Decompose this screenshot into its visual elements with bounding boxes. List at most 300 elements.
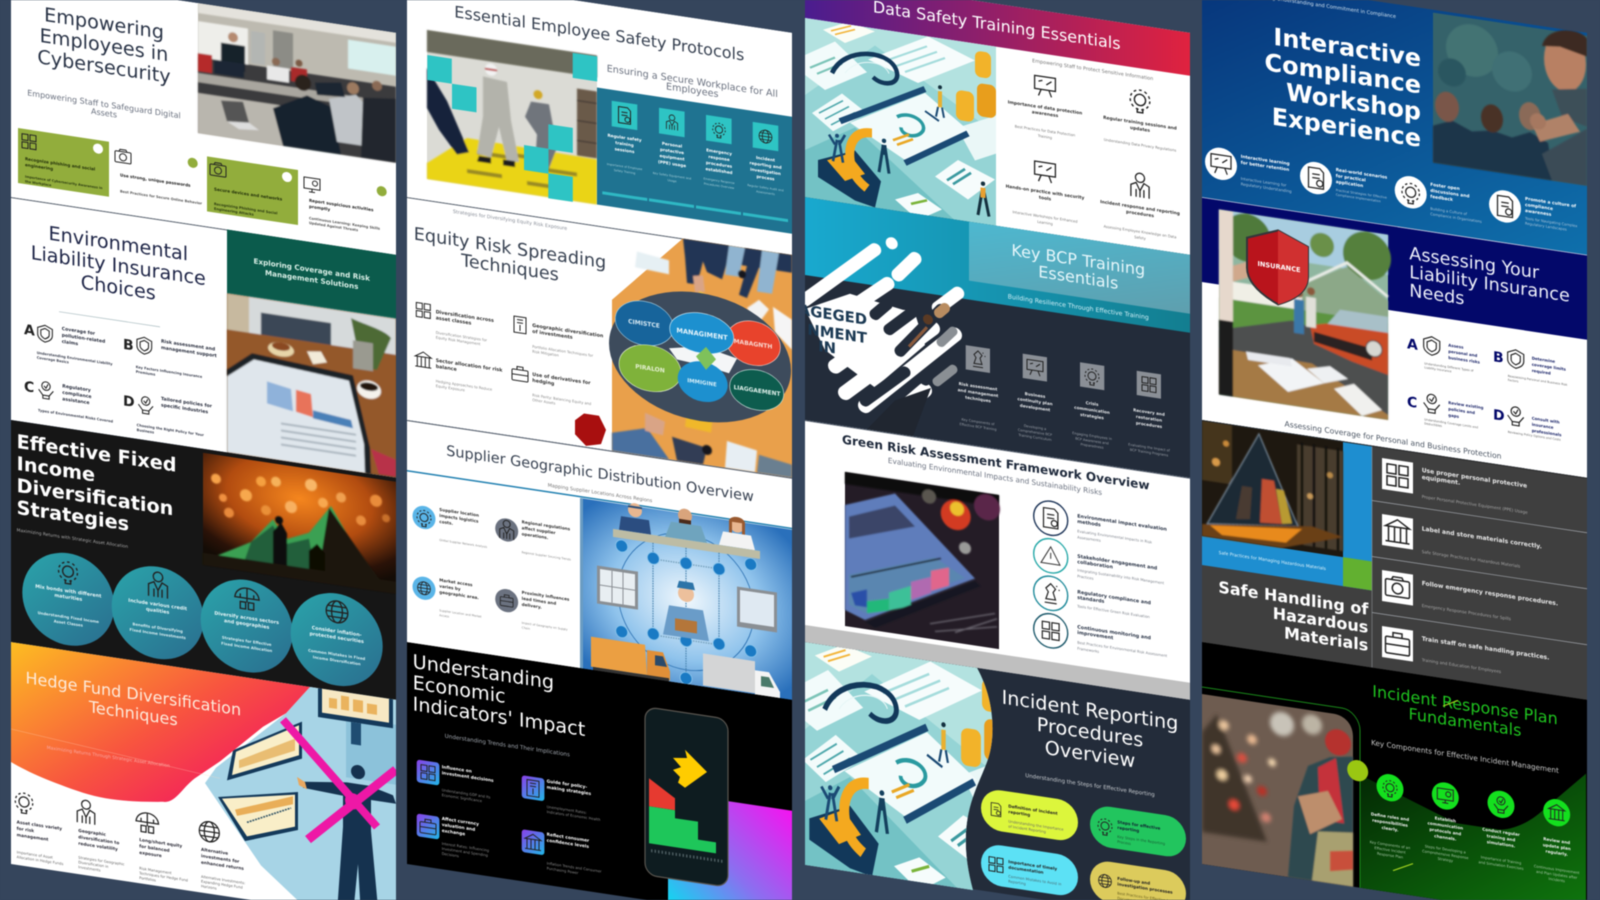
item C: Understanding Coverage Limits and (1424, 417, 1478, 429)
item 3: Crisis (1086, 400, 1098, 407)
item D: Choosing the Right Policy for Your (137, 423, 204, 437)
item 3 (1072, 361, 1112, 451)
item 3: Engaging Employees in (1072, 431, 1112, 441)
slide: Understanding Economic Indicators' Impact (407, 642, 792, 900)
circle card 2: Include various credit (128, 599, 187, 612)
row 3 (1382, 570, 1558, 628)
blue block with caption: Safe Practices for Managing Hazardous Materials (1219, 550, 1327, 572)
item 3 (415, 351, 503, 398)
item 4: BCP Training Programs (1130, 448, 1168, 457)
subtitle: Understanding Trends and Their Implications (445, 734, 570, 758)
item 2: Establish (1435, 815, 1456, 824)
graphic: white diagonal strokes with cropped photo text: NMENT (807, 320, 868, 347)
slide: Incident Response Plan Fundamentals (1202, 642, 1587, 900)
subtitle: Assets (91, 107, 117, 120)
item 3: Tools for Effective Green Risk Evaluation (1076, 604, 1150, 619)
card 3 (207, 156, 298, 225)
item B: coverage limits (1532, 362, 1567, 372)
item 2: Real-world scenarios (1336, 168, 1387, 181)
photo: team around strategy diagram: IMMIGINE (687, 378, 717, 388)
item 3: Interactive Workshops for Enhanced (1012, 210, 1078, 224)
pill 2: Process (1117, 840, 1131, 846)
row 4 (1382, 626, 1549, 682)
pink cross (283, 720, 396, 853)
item A: Understanding Different Types of (1424, 361, 1473, 373)
item 2: affect supplier (522, 525, 556, 535)
item 3: Techniques for Hedge Fund (138, 871, 188, 883)
item 2: for practical (1336, 173, 1366, 184)
item 3: Regulatory compliance and (1077, 590, 1151, 606)
item 1: methods (1077, 519, 1101, 528)
item 2: Indicators of Economic Health (547, 810, 600, 822)
item 4: Evaluating the Impact of (1128, 442, 1170, 453)
item 3: valuation and (442, 822, 475, 833)
item D: Tailored policies for (161, 397, 212, 410)
item 4: Continuous monitoring and (1077, 625, 1151, 641)
item 3 (1034, 574, 1151, 625)
item 2 (1103, 85, 1177, 153)
title: Compliance (1265, 48, 1421, 100)
item 2 (77, 799, 125, 876)
item 3 (417, 812, 489, 863)
card 3: Engineering Attacks (214, 207, 254, 217)
item 2: Risk Mitigation (532, 350, 559, 358)
bottom caption: Assessing Coverage for Personal and Business Protection (1285, 419, 1502, 461)
item 4: Frameworks (1077, 647, 1099, 654)
item 4 (522, 828, 602, 879)
item 1: Asset class variety (17, 820, 62, 832)
item 3: Learning (1037, 220, 1053, 226)
item 2: communication (1427, 820, 1463, 831)
title panel: Key BCP Training (1011, 241, 1145, 280)
illustration: trader with monitors (205, 671, 396, 900)
item 3 (412, 573, 482, 624)
item A: Coverage for (62, 327, 95, 337)
title: Experience (1272, 103, 1421, 153)
item 4: hedging (532, 378, 555, 387)
item C: gaps (1448, 412, 1460, 419)
item 2: Unemployment Rates: (547, 805, 587, 815)
teal panel (597, 88, 792, 234)
item 4 (199, 820, 245, 895)
item 1 (1205, 145, 1292, 194)
title: Safe Handling of (1218, 578, 1368, 619)
circle card 3: Strategies for Effective (222, 635, 271, 647)
photo: team around strategy diagram (609, 227, 792, 478)
subtitle: Ensuring a Secure Workplace for All (607, 64, 778, 100)
title: Diversification (17, 474, 173, 520)
item 2: Regular training sessions and (1103, 116, 1177, 132)
title: Indicators' Impact (413, 692, 586, 741)
pill 1: Definition of incident (1008, 804, 1058, 816)
slide: Environmental Liability Insurance Choices (11, 197, 396, 478)
item C: C (24, 379, 34, 396)
card 3: Secure devices and networks (214, 186, 283, 202)
item 3: and Simulation Exercises (1479, 860, 1524, 871)
item 4: compliance (1525, 202, 1553, 212)
item 4: regularly. (1546, 849, 1568, 857)
item 1 (15, 792, 63, 866)
item 2: Strategies for Geographic (78, 856, 125, 867)
item 4: Regulatory Landscapes (1525, 221, 1567, 232)
item 4 (512, 366, 591, 411)
item A: claims (62, 339, 78, 347)
row 2: Label and store materials correctly. (1422, 525, 1542, 550)
item 2: application (1336, 179, 1363, 189)
circle card 1: Mix bonds with different (35, 585, 101, 600)
card 1: engineering (25, 162, 53, 171)
item 3: Investment and Spending (442, 847, 488, 858)
item 4: Purchasing Power (547, 866, 579, 875)
item 2: Practices (1077, 574, 1094, 581)
item 4: delivery. (522, 602, 542, 610)
subtitle: Understanding the Steps for Effective Reporting (1025, 773, 1155, 798)
item 4: Alternative Investments: (201, 875, 245, 885)
item 2 (522, 775, 600, 822)
photo: insurance shield, family and car (1219, 210, 1391, 420)
item 2: Strategy (1438, 857, 1454, 863)
graphic: white diagonal strokes with cropped photo text: IN (818, 337, 836, 358)
item 2 (514, 316, 604, 364)
item 4: Other Assets (532, 398, 555, 406)
item 3: training and (1487, 833, 1515, 842)
item B: B (123, 337, 134, 354)
item 3: Long/short equity (139, 838, 182, 849)
row 2: Safe Storage Practices for Hazardous Materials (1422, 549, 1520, 569)
item 1 (416, 302, 494, 348)
card 3: Recognizing Phishing and Social (214, 202, 277, 215)
slide: Effective Fixed Income Diversification Strategies (11, 420, 396, 701)
graphic: white diagonal strokes with cropped photo text: AGEGED (799, 301, 867, 329)
teal panel: protective (660, 147, 684, 155)
item A: personal and (1448, 349, 1477, 358)
pill 4: Follow-up and (1117, 876, 1150, 886)
title: Incident Reporting (1002, 686, 1178, 735)
item C: policies and (1448, 406, 1475, 415)
item 2: Guide for policy- (547, 779, 587, 791)
pill 2 (1090, 804, 1186, 859)
item D: Reviewing Policy Options and Costs (1508, 430, 1561, 442)
item 2: Diversification in (78, 860, 108, 869)
item A: pollution-related (62, 332, 105, 345)
item 1: Global Supplier Network Analysis (439, 538, 488, 549)
item 4: Assessing Employee Knowledge on Data (1104, 225, 1176, 239)
title: Equity Risk Spreading (414, 225, 606, 273)
item 2 (1422, 779, 1469, 865)
item 3: Preparedness (1081, 442, 1104, 450)
slide: Hedge Fund Diversification Techniques (11, 642, 396, 900)
photo: insurance shield, family and car: INSURANCE (1257, 260, 1301, 274)
phone graphic (645, 707, 728, 887)
title: Needs (1409, 281, 1464, 310)
item C: compliance (62, 390, 92, 400)
item D: D (123, 393, 135, 411)
title: Green Risk Assessment Framework Overview (842, 433, 1150, 493)
item 4: Proximity influences (522, 590, 569, 602)
title: Effective Fixed (17, 430, 177, 477)
title: Workshop (1286, 78, 1421, 126)
item 4 (1489, 188, 1578, 233)
item 4: improvement (1077, 630, 1114, 641)
title: Hazardous (1273, 604, 1368, 637)
item D: professionals (1532, 428, 1562, 437)
item D: specific industries (161, 402, 208, 415)
item 1: Key Components of (961, 417, 995, 426)
item C: Review existing (1448, 400, 1483, 410)
card 2: Best Practices for Secure Online Behavior (120, 189, 202, 206)
item 2: Developing a (1024, 424, 1046, 431)
item 2: Business (1025, 391, 1045, 399)
item 4: Best Practices for Environmental Risk Assessment (1077, 641, 1167, 658)
item 4: update plan (1543, 842, 1571, 851)
item 4: enhanced returns (201, 860, 244, 872)
photo: team around strategy diagram: CIMISTCE (628, 318, 660, 330)
item A: Coverage Basics (37, 356, 69, 364)
item 3: Building a Culture of (1430, 207, 1467, 216)
item 1 (1008, 71, 1082, 145)
green banner: Exploring Coverage and Risk (254, 256, 370, 283)
item 4: confidence levels (547, 838, 589, 850)
item 1: Importance of Asset (17, 850, 53, 860)
item 1: Diversification across (436, 310, 494, 324)
title: Liability Insurance (31, 241, 206, 290)
slide: Green Risk Assessment Framework Overview (805, 420, 1190, 701)
item 3: Sector allocation for risk (436, 359, 502, 374)
circle card 2: Fixed Income Investments (130, 627, 187, 640)
item 3: for balanced (139, 843, 170, 854)
teal panel: Procedures Overview (704, 182, 735, 190)
teal panel: sessions (615, 146, 635, 154)
item 4: Alternative (201, 848, 228, 857)
green banner: Management Solutions (265, 268, 358, 291)
item A: business risks (1448, 355, 1480, 365)
item 1: Effective Incident (1374, 846, 1406, 855)
item 1 (1370, 771, 1410, 861)
item 2: Stakeholder engagement and (1077, 555, 1157, 572)
item 1: Risk assessment (959, 381, 997, 392)
row 3: Follow emergency response procedures. (1422, 580, 1558, 607)
title: Income (17, 452, 95, 487)
item 2: Regional Supplier Sourcing Trends (522, 550, 571, 562)
subtitle: Maximizing Returns with Strategic Asset Allocation (17, 527, 128, 550)
item 1: Interactive Learning for (1241, 176, 1286, 188)
item 1: responsibilities (1372, 818, 1408, 828)
item 2 (1034, 536, 1165, 591)
pill 1: reporting (1008, 809, 1030, 817)
item 3: Supplier Location and Market (439, 608, 482, 619)
card 1 (18, 128, 109, 197)
title: Choices (81, 271, 156, 305)
item 1: management (17, 832, 48, 843)
item B: Premiums (136, 370, 155, 377)
teal panel: training (615, 140, 634, 148)
green banner (227, 229, 396, 319)
item 1 (1034, 499, 1167, 553)
item 4: Promote a culture of (1525, 197, 1576, 210)
circle card 3: Diversify across sectors (214, 612, 279, 626)
item 2: Investments (78, 865, 101, 873)
item B: B (1493, 349, 1504, 367)
item D: Business (137, 428, 154, 435)
title: Essential Employee Safety Protocols (454, 2, 744, 65)
title: Strategies (17, 496, 129, 536)
circle card 3 (200, 578, 292, 674)
item B: Factors (1508, 378, 1519, 384)
photo: workers in warehouse (427, 30, 597, 204)
item 2: operations. (522, 531, 549, 540)
subtitle: Mapping Supplier Locations Across Regions (548, 483, 653, 504)
item 4: restoration (1136, 414, 1162, 423)
slide: Supplier Geographic Distribution Overview (407, 420, 792, 701)
item 1: and management (958, 387, 998, 398)
item 3: Access (439, 613, 450, 619)
item 3: Affect currency (442, 817, 479, 827)
circle card 4: protected securities (309, 631, 364, 645)
item 2: Steps for Developing a (1425, 844, 1466, 855)
photo: glowing chart landscape (203, 453, 396, 594)
item 1: clearly. (1382, 825, 1399, 833)
circle card 4: Common Mistakes in Fixed (308, 648, 365, 661)
item 1: asset classes (436, 315, 471, 327)
item 4 (1128, 369, 1171, 458)
teal panel: procedures (706, 160, 733, 169)
item C (1407, 391, 1484, 434)
slide: Incident Reporting Procedures Overview (793, 637, 1190, 900)
teal panel: Key Safety Equipment and (653, 171, 691, 181)
item 4: Expanding Hedge Fund (201, 880, 243, 890)
item 3: varies by (439, 583, 461, 592)
subtitle: Empowering Staff to Protect Sensitive Information (1032, 58, 1153, 82)
item 3: geographic area. (439, 589, 479, 600)
item D (1493, 404, 1562, 442)
item 2: continuity plan (1017, 396, 1053, 406)
item 4: Reflect consumer (547, 833, 589, 844)
title: Understanding (413, 650, 554, 694)
pill 3 (981, 842, 1078, 898)
subtitle: Employees (666, 81, 719, 100)
pill 3: Reporting (1008, 880, 1026, 886)
item A: Assess (1448, 342, 1463, 350)
item 3 (1479, 787, 1524, 871)
item 4 (1100, 167, 1180, 246)
title: Supplier Geographic Distribution Overview (446, 443, 754, 506)
item B: Key Factors Influencing Insurance (136, 365, 202, 379)
item C: C (1407, 394, 1417, 412)
title: Incident Response Plan (1372, 682, 1558, 728)
pill 2: reporting (1117, 825, 1139, 833)
subtitle: Evaluating Environmental Impacts and Sustainability Risks (888, 456, 1102, 497)
teal panel: Usage (667, 178, 677, 183)
item C: Regulatory (62, 384, 91, 394)
green gradient area (1360, 740, 1586, 900)
item 2: reduce volatility (78, 841, 118, 853)
item B: required (1532, 368, 1551, 376)
item 1: Importance of data protection (1008, 100, 1082, 117)
row 2 (1382, 514, 1542, 572)
title: Techniques (88, 697, 178, 729)
gradient header blob (10, 642, 310, 803)
photo: team around strategy diagram: LIAGGAEMENT (734, 385, 780, 398)
teal panel: reporting and (749, 160, 782, 170)
item 4: procedures (1136, 420, 1163, 429)
item 3 (1006, 157, 1084, 231)
item 3 (1395, 174, 1482, 224)
card 4: promptly (309, 204, 330, 212)
teal panel: Personal (662, 141, 682, 149)
teal panel: response (708, 154, 730, 162)
item 1: Best Practices for Data Protection (1015, 124, 1075, 138)
item D: insurance (1532, 422, 1554, 430)
item 3: standards (1077, 595, 1104, 605)
circle card 3: and geographies (224, 618, 269, 631)
item 3: exposure (139, 850, 162, 859)
item C (24, 378, 113, 424)
circle card 2: Benefits of Diversifying (133, 621, 183, 634)
red heptagon (575, 412, 606, 449)
illustration: isometric documents (803, 15, 998, 232)
title: Empowering (44, 3, 164, 44)
item 2: Comprehensive BCP (1018, 428, 1052, 437)
item 3: Market access (439, 577, 473, 587)
pill 2: Steps for effective (1117, 819, 1160, 831)
item C: assistance (62, 396, 90, 406)
item 1 (412, 503, 488, 549)
teal panel: Assessments (756, 189, 775, 196)
item 1: impacts logistics (439, 513, 479, 524)
title: Interactive (1273, 23, 1421, 73)
item B: Risk assessment and (161, 340, 215, 353)
item 4 (1034, 611, 1168, 665)
slide: Equity Risk Spreading Techniques (407, 197, 792, 478)
photo: team around strategy diagram: MANAGIMENT (676, 326, 728, 342)
item 4: Continuous Improvement (1534, 864, 1579, 875)
subtitle: Building Resilience Through Effective Training (1008, 293, 1149, 322)
photo: hazard pyramid (1202, 420, 1343, 557)
item 2: Portfolio Allocation Techniques for (532, 345, 593, 358)
item B: Determine (1532, 355, 1555, 364)
item 2: updates (1130, 125, 1150, 134)
slide: Safe Handling of Hazardous Materials (1202, 420, 1587, 701)
item A: A (1407, 336, 1418, 354)
item 4: Incidents (1549, 877, 1565, 883)
item D: Consult with (1532, 415, 1560, 425)
item 4: procedures (1126, 209, 1154, 219)
circle card 2: qualities (146, 606, 170, 616)
circle card 1: maturities (54, 593, 82, 603)
item 2 (495, 515, 571, 562)
subtitle: Empowering Staff to Safeguard Digital (27, 88, 181, 120)
row 1: equipment. (1422, 474, 1460, 487)
pill 3: Importance of timely (1008, 859, 1057, 871)
item 4: lead times and (522, 596, 556, 606)
item 1: Economic Significance (442, 793, 483, 803)
item 1: investment decisions (442, 770, 494, 784)
item A (1407, 333, 1480, 378)
graphic: white diagonal strokes with cropped photo text (799, 223, 958, 443)
item 3: Hedging Approaches to Reduce (436, 379, 492, 392)
title: Techniques (460, 251, 559, 286)
illustration: isometric documents (793, 637, 1007, 900)
teal panel: process (756, 174, 775, 182)
photo: team around strategy diagram: PIRALON (635, 363, 665, 375)
item 3: tools (1039, 195, 1051, 203)
title: Cybersecurity (37, 45, 171, 88)
item 2: Geographic (78, 829, 106, 838)
title: Liability Insurance (1409, 263, 1570, 307)
teal panel: (PPE) usage (658, 159, 686, 168)
item A: A (24, 322, 35, 340)
pill 4: investigation processes (1117, 881, 1173, 895)
